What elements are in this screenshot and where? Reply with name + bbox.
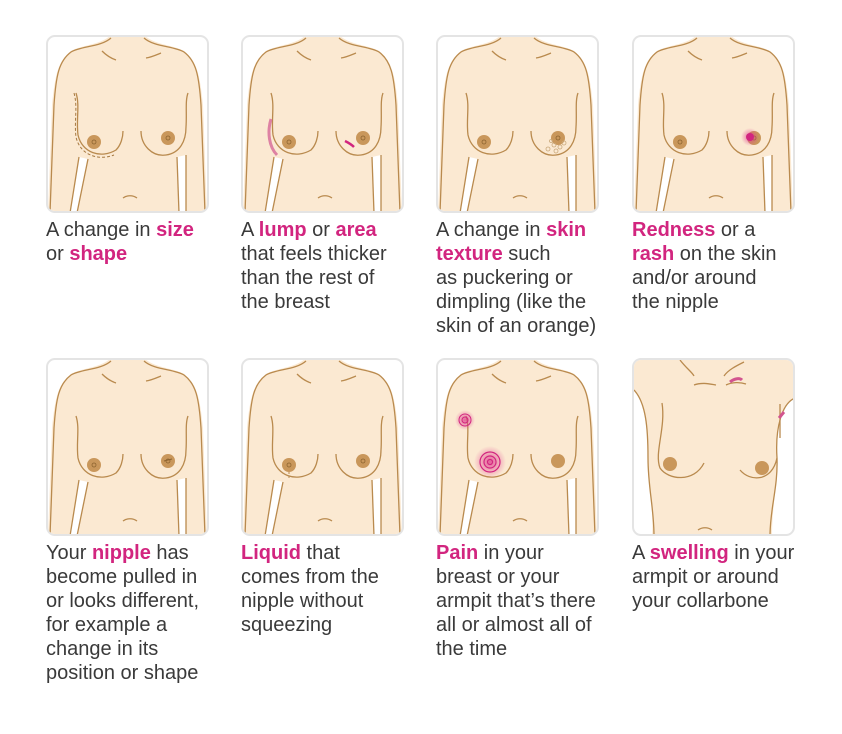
panel: size or shape xyxy=(46,35,209,213)
text: lump: A lump or area xyxy=(241,219,377,241)
text: redness: the nipple xyxy=(632,291,719,313)
panel: liquid xyxy=(241,358,404,536)
panel: lump xyxy=(241,35,404,213)
text: lump xyxy=(241,219,387,313)
text: redness: rash on the skin xyxy=(632,243,777,265)
text: size or shape xyxy=(46,219,194,265)
text: pain: Pain in your xyxy=(436,542,544,564)
text: pain: armpit that’s there xyxy=(436,590,596,612)
text: skin texture: texture such xyxy=(436,243,551,265)
text: nipple: for example a xyxy=(46,614,167,636)
text: liquid: squeezing xyxy=(241,614,332,636)
text: redness: and/or around xyxy=(632,267,757,289)
panel: swelling xyxy=(632,358,795,536)
text: pain: all or almost all of xyxy=(436,614,592,636)
text: skin texture: as puckering or xyxy=(436,267,573,289)
text: nipple xyxy=(46,542,199,684)
text: swelling: armpit or around xyxy=(632,566,779,588)
text: swelling: A swelling in your xyxy=(632,542,794,564)
text: skin texture: skin of an orange) xyxy=(436,315,596,337)
panel: nipple xyxy=(46,358,209,536)
panel: skin texture xyxy=(436,35,599,213)
text: liquid: nipple without xyxy=(241,590,363,612)
text: redness xyxy=(632,219,777,313)
text: size or shape: or shape xyxy=(46,243,127,265)
text: lump: than the rest of xyxy=(241,267,374,289)
panel: pain xyxy=(436,358,599,536)
text: skin texture: A change in skin xyxy=(436,219,586,241)
text: liquid: Liquid that xyxy=(241,542,340,564)
text: liquid: comes from the xyxy=(241,566,379,588)
text: nipple: position or shape xyxy=(46,662,198,684)
text: swelling xyxy=(632,542,794,612)
text: pain xyxy=(436,542,596,660)
text: nipple: or looks different, xyxy=(46,590,199,612)
text: size or shape: A change in size xyxy=(46,219,194,241)
text: lump: the breast xyxy=(241,291,330,313)
panel: redness xyxy=(632,35,795,213)
text: lump: that feels thicker xyxy=(241,243,387,265)
text: skin texture xyxy=(436,219,596,337)
text: swelling: your collarbone xyxy=(632,590,769,612)
text: skin texture: dimpling (like the xyxy=(436,291,586,313)
text: redness: Redness or a xyxy=(632,219,755,241)
text: nipple: change in its xyxy=(46,638,158,660)
text: liquid xyxy=(241,542,379,636)
text: nipple: become pulled in xyxy=(46,566,197,588)
text: nipple: Your nipple has xyxy=(46,542,189,564)
text: pain: breast or your xyxy=(436,566,559,588)
text: pain: the time xyxy=(436,638,507,660)
